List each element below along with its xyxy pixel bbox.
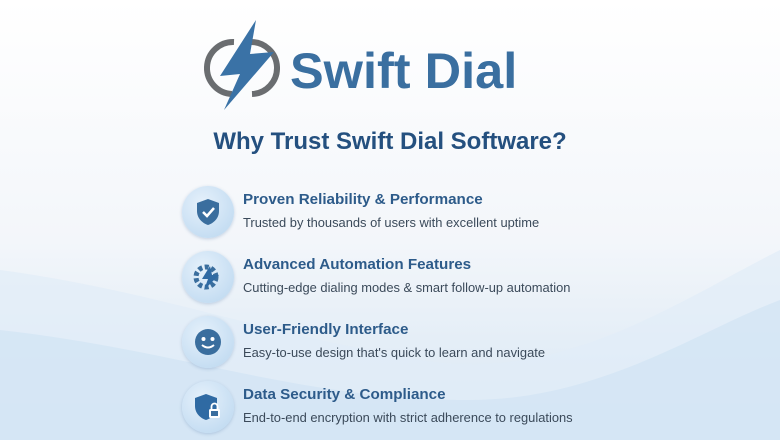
row: interface: Easy-to-use design that's quick to learn and navigate: [243, 345, 545, 360]
row: security: [180, 380, 573, 436]
row: security: End-to-end encryption with strict adherence to regulations: [243, 410, 573, 425]
row: interface: User-Friendly Interface: [243, 321, 408, 338]
icon: shield lock: [182, 381, 234, 433]
icon: smiley: [182, 316, 234, 368]
row: automation: Advanced Automation Features: [243, 256, 471, 273]
logo text: Swift Dial: [290, 42, 517, 99]
row: security: Data Security & Compliance: [243, 386, 446, 403]
row: reliability: [180, 186, 539, 240]
row: reliability: Proven Reliability & Performance: [243, 191, 483, 208]
icon: shield check: [182, 186, 234, 238]
icon: gear bolt: [182, 251, 234, 303]
row: reliability: Trusted by thousands of users with excellent uptime: [243, 215, 539, 230]
row: automation: [180, 250, 570, 306]
row: interface: [180, 316, 545, 370]
logo: [204, 20, 517, 110]
row: automation: Cutting-edge dialing modes & smart follow-up automation: [243, 280, 570, 295]
title: Why Trust Swift Dial Software?: [213, 128, 567, 155]
icon: lightning logo: [204, 20, 280, 110]
